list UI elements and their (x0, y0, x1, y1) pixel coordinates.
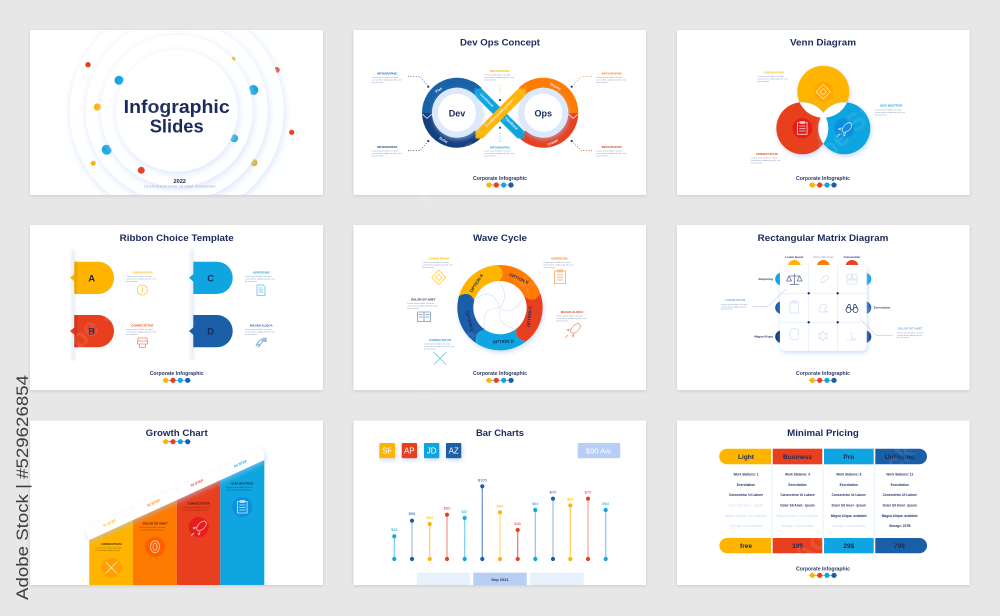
step labels: 04 STEP (234, 459, 248, 468)
column 4 text and icon: consectetur adipiscing elit (226, 488, 251, 492)
title dots (163, 439, 191, 444)
legend badges (379, 443, 461, 458)
infinity loop diagram: Create (547, 138, 559, 147)
callout: top left: INFOGRAPHIC (377, 71, 398, 75)
footer (473, 176, 527, 188)
wave cycle ring: OPTION A (469, 272, 485, 293)
callout: lorem ipsum with icon (422, 257, 453, 285)
option C text and document icon (245, 270, 276, 296)
pale matrix icons (790, 274, 857, 341)
average badge (578, 443, 620, 458)
callout: lorem ipsum: LOREM IPSUM (763, 70, 784, 74)
callout: bottom left: consectetur adipiscing elit, sed (372, 152, 402, 155)
header row: Business (783, 454, 812, 461)
matrix card (780, 265, 867, 351)
feature rows: pro: Magna Aliqua: available (831, 514, 867, 518)
callout: top centre: INFOGRAPHIC (490, 69, 511, 73)
lollipop chart: $64 (532, 501, 539, 506)
footer (796, 567, 850, 578)
column 1 text and icon: consectetur adipiscing elit (95, 549, 120, 552)
cover title: Infographic (124, 96, 230, 117)
panel: minimal pricing (677, 420, 970, 585)
column dividers (772, 464, 874, 538)
legend badges: AP (404, 447, 415, 456)
lollipop chart: $56 (409, 511, 416, 516)
callout: top right: do eiusmod (596, 82, 608, 84)
lollipop chart: $53 (426, 515, 434, 520)
wave cycle ring: OPTION C (526, 305, 533, 327)
heading: Minimal Pricing (787, 428, 859, 439)
callout: right: do eiusmod (897, 337, 909, 339)
feature rows: light: Consectetur Ut Labore (729, 493, 763, 497)
panel: venn diagram (677, 30, 970, 195)
heading: Venn Diagram (790, 38, 856, 48)
lollipop chart: $36 (391, 527, 398, 532)
callout: lorem ipsum: consectetur adipiscing elit, sed (758, 78, 788, 80)
callout: quis nostrud: Lorem ipsum dolor sit amet, (875, 108, 902, 112)
column 3 text and icon (182, 502, 211, 537)
column 3 text and icon: CONSECTETUR (188, 502, 211, 506)
callout: bottom centre: Lorem ipsum dolor sit amet, (484, 150, 511, 152)
price row: 79$ (894, 543, 905, 550)
callout: right: consectetur adipiscing elit (897, 334, 922, 337)
lollipop chart: $64 (602, 501, 610, 506)
column 1 text and icon (95, 542, 122, 578)
option B text and icon: consectetur adipiscing elit, sed (126, 330, 157, 334)
feature rows: light: Exercitation (737, 483, 755, 487)
feature rows: unlimited: Work Stations: 12 (886, 472, 913, 476)
callout: consectetur: CONSECTETUR (756, 152, 779, 156)
header row: Light (738, 454, 755, 461)
callout: top centre (484, 69, 515, 101)
column 1 text and icon: LOREM IPSUM (101, 542, 122, 546)
stock watermarks: Adobe Stock (27, 256, 161, 390)
callout: bottom left: do eiusmod (372, 155, 384, 157)
price row: free (740, 543, 752, 550)
callout: right: Lorem ipsum dolor sit amet, (897, 332, 924, 334)
ribbon shadows (72, 250, 193, 360)
icon: rocket (834, 118, 854, 138)
footer: Corporate Infographic (796, 567, 850, 573)
infinity loop diagram: Dev (449, 108, 465, 118)
side tab labels: Exercitation (874, 306, 890, 310)
lollipop chart: $70 (550, 490, 557, 495)
stock watermarks: Adobe Stock (407, 266, 541, 400)
infinity loop diagram: Continous (479, 93, 494, 108)
footer: Corporate Infographic (796, 176, 850, 182)
option B text and icon (126, 324, 157, 348)
callout: aspercing with icon: consectetur adipiscing elit, sed (544, 264, 574, 266)
wave cycle ring: OPTION D (492, 338, 514, 345)
callout: quis nostrud: consectetur adipiscing elit, sed (875, 111, 906, 114)
step labels: 02 STEP (147, 498, 161, 508)
wave cycle ring: OPTION E (464, 311, 475, 332)
option D text and icon (245, 324, 276, 347)
feature rows: pro (831, 472, 867, 528)
callout: bottom right: INFOGRAPHIC (602, 145, 623, 149)
option D text and icon: Lorem ipsum dolor sit amet, (245, 328, 272, 331)
option B text and icon: do eiusmod (126, 334, 138, 336)
header row: Unlimited (885, 454, 914, 461)
infinity loop diagram: Plan (434, 86, 443, 94)
infinity loop diagram: Deploy (549, 82, 562, 91)
top tab labels: Lorem Ipsum (785, 255, 804, 259)
option C text and document icon: Lorem ipsum dolor sit amet, (245, 275, 272, 278)
wave cycle ring (457, 265, 543, 350)
option B text and icon: Lorem ipsum dolor sit amet, (126, 328, 153, 331)
ribbon tab A (70, 262, 114, 294)
feature rows: business (777, 472, 819, 528)
option A text and coin icon: LOREM IPSUM (132, 270, 153, 274)
heading: Dev Ops Concept (460, 38, 541, 48)
cover title: Slides (150, 116, 204, 137)
feature rows: light: Dolor Sit Amet - Ipsum (729, 504, 763, 508)
heading: Bar Charts (476, 428, 524, 439)
lollipop chart: $66 (567, 496, 574, 502)
column 1 text and icon: Lorem ipsum dolor sit amet, (95, 546, 122, 550)
footer (473, 371, 527, 383)
callout: dolor sit amet with book icon (407, 297, 438, 322)
column 3 text and icon: consectetur adipiscing elit (182, 508, 208, 512)
feature rows: pro: Dolor Sit Amet - Ipsum (832, 504, 866, 508)
callout: bottom right: do eiusmod (596, 155, 608, 157)
stock watermarks: Adobe Stock (77, 56, 211, 190)
stock watermarks: Adobe Stock (407, 446, 541, 580)
ribbon tab B (70, 315, 114, 347)
slanted white band (84, 447, 264, 540)
column 4 text and icon: QUIS NOSTRUD (231, 482, 253, 486)
feature rows: unlimited: Dolor Sit Amet - Ipsum (883, 504, 917, 508)
callout: quis nostrud (875, 104, 906, 116)
callout: consectetur with tools icon: consectetur adipiscing elit, sed (424, 345, 455, 348)
panel: cover slide (29, 30, 324, 197)
feature rows: business: Storage: not available (781, 524, 814, 528)
feature rows: light: Storage: not available (729, 524, 763, 528)
callout: bottom centre (484, 127, 515, 158)
panel: growth chart (30, 420, 323, 585)
footer (796, 176, 850, 188)
lollipop chart: $105 (478, 478, 488, 482)
top tabs (788, 260, 858, 273)
callout: left: Lorem ipsum dolor sit amet, (721, 303, 748, 306)
callout: right (860, 319, 924, 339)
lollipop chart: $60 (444, 506, 451, 511)
infinity loop diagram: Continous Integration (485, 99, 514, 128)
callout: lorem ipsum (758, 70, 788, 83)
feature rows: unlimited: Magna Aliqua: available (882, 514, 918, 518)
footer: Corporate Infographic (473, 371, 527, 377)
feature rows: unlimited: Storage: 20TB (889, 524, 911, 528)
callout: magna aliqua with rocket icon: do eiusmod (556, 320, 568, 322)
panel: bar charts (354, 420, 646, 585)
option D text and icon: MAGNA ALIQUA (250, 324, 274, 328)
feature rows: business: Magna Aliqua: not available (777, 514, 819, 518)
feature rows: light: Magna Aliqua: not available (725, 514, 767, 518)
footer (150, 371, 204, 383)
option A text and coin icon: consectetur adipiscing elit, sed (126, 277, 157, 280)
footer: Corporate Infographic (473, 176, 527, 182)
callout: bottom left: Lorem ipsum dolor sit amet, (372, 149, 399, 152)
callout: magna aliqua with rocket icon: Lorem ipsum dolor sit amet, (556, 314, 583, 318)
heading: Rectangular Matrix Diagram (758, 233, 888, 244)
infinity loop diagram: Feedback (504, 116, 519, 131)
option A text and coin icon: do eiusmod (126, 281, 138, 283)
option A text and coin icon (126, 270, 157, 295)
callout: top centre: consectetur adipiscing elit, sed (484, 76, 515, 79)
callout: consectetur: do eiusmod (751, 162, 763, 164)
callout: consectetur with tools icon (424, 338, 455, 364)
left and right tabs (775, 273, 871, 343)
cover year and subtitle: 2022 (173, 179, 186, 185)
stock id vertical text: Adobe Stock | #529626854 (13, 375, 32, 600)
lollipop chart: $70 (585, 490, 592, 495)
option A text and coin icon: Lorem ipsum dolor sit amet, (126, 275, 153, 278)
step labels: 01 STEP (103, 518, 117, 528)
side tab labels (754, 277, 890, 339)
callout: quis nostrud: QUIS NOSTRUD (880, 104, 902, 108)
callout: top right: Lorem ipsum dolor sit amet, (596, 76, 623, 79)
stock watermarks: Adobe Stock (787, 436, 921, 570)
feature rows: business: Consectetur Ut Labore (780, 493, 815, 497)
feature rows: pro: Exercitation (840, 483, 858, 487)
callout: aspercing with icon: ASPERCING (551, 256, 569, 260)
month selector: Sep 2021 (491, 577, 509, 582)
callout: quis nostrud: do eiusmod (875, 114, 887, 116)
cover year and subtitle: Lorem ipsum dolor sit amet consectetur (144, 185, 217, 189)
option D text and icon: consectetur adipiscing elit, sed (245, 330, 276, 334)
callout: magna aliqua with rocket icon: consectetur adipiscing elit, sed (556, 317, 587, 320)
stock watermarks: Adobe Stock (47, 436, 181, 570)
feature rows: light: Work Stations: 1 (733, 472, 759, 476)
month selector (417, 573, 584, 585)
heading: Wave Cycle (473, 233, 527, 244)
callout: dolor sit amet with book icon: do eiusmod (407, 308, 419, 310)
column 4 text and icon: Lorem ipsum dolor sit amet, (226, 486, 253, 489)
callout: dolor sit amet with book icon: consectetur adipiscing elit, sed (407, 304, 438, 307)
lollipop chart: $40 (514, 521, 522, 526)
callout: consectetur with tools icon: Lorem ipsum dolor sit amet, (424, 342, 451, 346)
infinity loop diagram (422, 82, 578, 147)
callout: top centre: Lorem ipsum dolor sit amet, (484, 74, 511, 76)
ribbon tab D (189, 315, 233, 347)
feature rows: business: Exercitation (788, 483, 807, 487)
feature rows: unlimited: Exercitation (891, 483, 909, 487)
column 3 text and icon: Lorem ipsum dolor sit amet, (182, 506, 210, 509)
icon: binoculars (846, 304, 858, 312)
callout: consectetur with tools icon: CONSECTETUR (429, 338, 452, 342)
callout: bottom right (571, 140, 627, 157)
icon: diamond badge (813, 82, 833, 102)
column 2 text and icon: consectetur adipiscing elit (139, 528, 164, 532)
icon: scales (786, 274, 802, 284)
callout: top left: do eiusmod (372, 82, 384, 84)
footer (796, 371, 850, 383)
callout: bottom centre: INFOGRAPHIC (490, 145, 511, 149)
callout: lorem ipsum with icon: consectetur adipiscing elit, sed (422, 264, 453, 266)
callout: lorem ipsum with icon: LOREM IPSUM (428, 257, 449, 261)
legend badges: JD (427, 447, 437, 456)
lollipop chart: $57 (461, 509, 469, 514)
price row: 19$ (792, 543, 803, 550)
callout: dolor sit amet with book icon: DOLOR SIT AMET (411, 297, 436, 301)
option D text and icon: do eiusmod (245, 334, 257, 336)
callout: consectetur: Lorem ipsum dolor sit amet, (751, 156, 778, 160)
price row (719, 538, 927, 553)
stock watermarks: Adobe Stock (787, 256, 921, 390)
callout: consectetur with tools icon: do eiusmod (424, 348, 436, 350)
callout: aspercing with icon: do eiusmod (544, 267, 556, 269)
average badge: $90 Aw. (586, 446, 612, 456)
stock watermarks (27, 56, 921, 580)
cover year and subtitle (144, 179, 217, 189)
panel: wave cycle (354, 225, 646, 390)
callout: left (721, 289, 786, 310)
callout: dolor sit amet with book icon: Lorem ipsum dolor sit amet, (407, 302, 435, 305)
feature rows: business: Work Stations: 4 (785, 472, 810, 476)
option B text and icon: CONSECTETUR (131, 324, 154, 328)
callout: bottom centre: consectetur adipiscing elit, sed (484, 152, 515, 155)
callout: bottom centre: do eiusmod (484, 156, 496, 158)
callout: aspercing with icon: Lorem ipsum dolor sit amet, (544, 261, 571, 264)
three overlapping circles (776, 66, 870, 154)
feature rows: light (725, 472, 767, 528)
stepped columns (89, 460, 264, 585)
footer: Corporate Infographic (796, 371, 850, 377)
step labels (103, 459, 248, 528)
header row: Pro (843, 454, 854, 461)
feature rows: pro: Consectetur Ut Labore (832, 493, 866, 497)
callout: left: consectetur adipiscing elit (721, 306, 746, 308)
column 2 text and icon: DOLOR SIT AMET (143, 522, 168, 526)
infinity loop diagram: Build (438, 136, 448, 144)
top tab labels (785, 255, 861, 259)
side tab labels: Magna Aliqua (754, 335, 773, 339)
concentric rings with dots (68, 30, 294, 195)
top tab labels: Dolor Sit Amet (813, 255, 833, 259)
callout: aspercing with icon (544, 256, 574, 284)
feature rows: unlimited (882, 472, 918, 528)
ribbon tab B: B (88, 326, 95, 338)
panel: ribbon choice template (30, 225, 323, 390)
callout: bottom right: Lorem ipsum dolor sit amet, (596, 149, 623, 152)
ribbon tab D: D (207, 326, 214, 338)
feature rows: business: Dolor Sit Amet - Ipsum (780, 504, 815, 508)
callout: magna aliqua with rocket icon: MAGNA ALIQUA (561, 310, 584, 314)
callout: magna aliqua with rocket icon (556, 310, 587, 338)
legend badges: SF (382, 447, 392, 456)
icon: clipboard (792, 118, 812, 138)
option C text and document icon: ASPERCING (253, 270, 271, 274)
lollipop chart (391, 478, 610, 561)
callout: consectetur: consectetur adipiscing elit, sed (751, 159, 781, 162)
callout: left: do eiusmod (721, 308, 733, 310)
legend badges: AZ (449, 447, 459, 456)
option C text and document icon: do eiusmod (245, 281, 257, 283)
price row: 29$ (843, 543, 855, 550)
callout: right: DOLOR SIT AMET (898, 326, 923, 330)
feature rows: pro: Storage: not available (832, 524, 866, 528)
feature rows: pro: Work Stations: 8 (836, 472, 862, 476)
callout: bottom left (372, 140, 429, 157)
column 2 text and icon: Lorem ipsum dolor sit amet, (139, 526, 166, 529)
heading: Growth Chart (146, 428, 209, 439)
lollipop chart: $60 (497, 504, 504, 508)
ribbon tab A: A (88, 274, 95, 285)
option C text and document icon: consectetur adipiscing elit, sed (245, 277, 276, 280)
callout: top left (372, 71, 429, 88)
ribbon tab C: C (207, 274, 214, 285)
step labels: 03 STEP (190, 478, 205, 488)
panel: rectangular matrix diagram (677, 225, 970, 390)
header row (719, 449, 927, 464)
callout: top right: INFOGRAPHIC (602, 71, 623, 75)
callout: top right (571, 71, 627, 88)
callout: top left: consectetur adipiscing elit, sed (372, 78, 402, 81)
panel: dev ops concept (354, 30, 646, 195)
callout: bottom left: INFOGRAPHIC (377, 145, 398, 149)
column 4 text and icon (226, 482, 253, 517)
side tab labels: Adipiscing (758, 277, 773, 281)
feature rows: unlimited: Consectetur Ut Labore (883, 493, 917, 497)
callout: lorem ipsum: Lorem ipsum dolor sit amet, (758, 75, 785, 78)
callout: lorem ipsum with icon: Lorem ipsum dolor sit amet, (422, 261, 450, 264)
cover title (124, 96, 230, 137)
callout: lorem ipsum: do eiusmod (758, 81, 770, 83)
footer: Corporate Infographic (150, 371, 204, 377)
callout: bottom right: consectetur adipiscing elit, sed (596, 152, 627, 155)
stock watermarks: Adobe Stock (407, 76, 541, 210)
heading: Ribbon Choice Template (120, 233, 234, 244)
callout: lorem ipsum with icon: do eiusmod (422, 267, 435, 269)
callout: consectetur (751, 152, 781, 164)
stock watermarks: Adobe Stock (777, 66, 911, 200)
ribbon tab C (189, 262, 233, 294)
column 2 text and icon (139, 522, 168, 557)
callout: top centre: do eiusmod (484, 80, 496, 82)
top tab labels: Consectetur (844, 255, 861, 259)
callout: left: LOREM IPSUM (725, 298, 746, 302)
callout: top left: Lorem ipsum dolor sit amet, (372, 76, 399, 79)
callout: top right: consectetur adipiscing elit, sed (596, 78, 627, 81)
wave cycle ring: OPTION B (508, 272, 530, 285)
infinity loop diagram: Ops (535, 108, 552, 118)
